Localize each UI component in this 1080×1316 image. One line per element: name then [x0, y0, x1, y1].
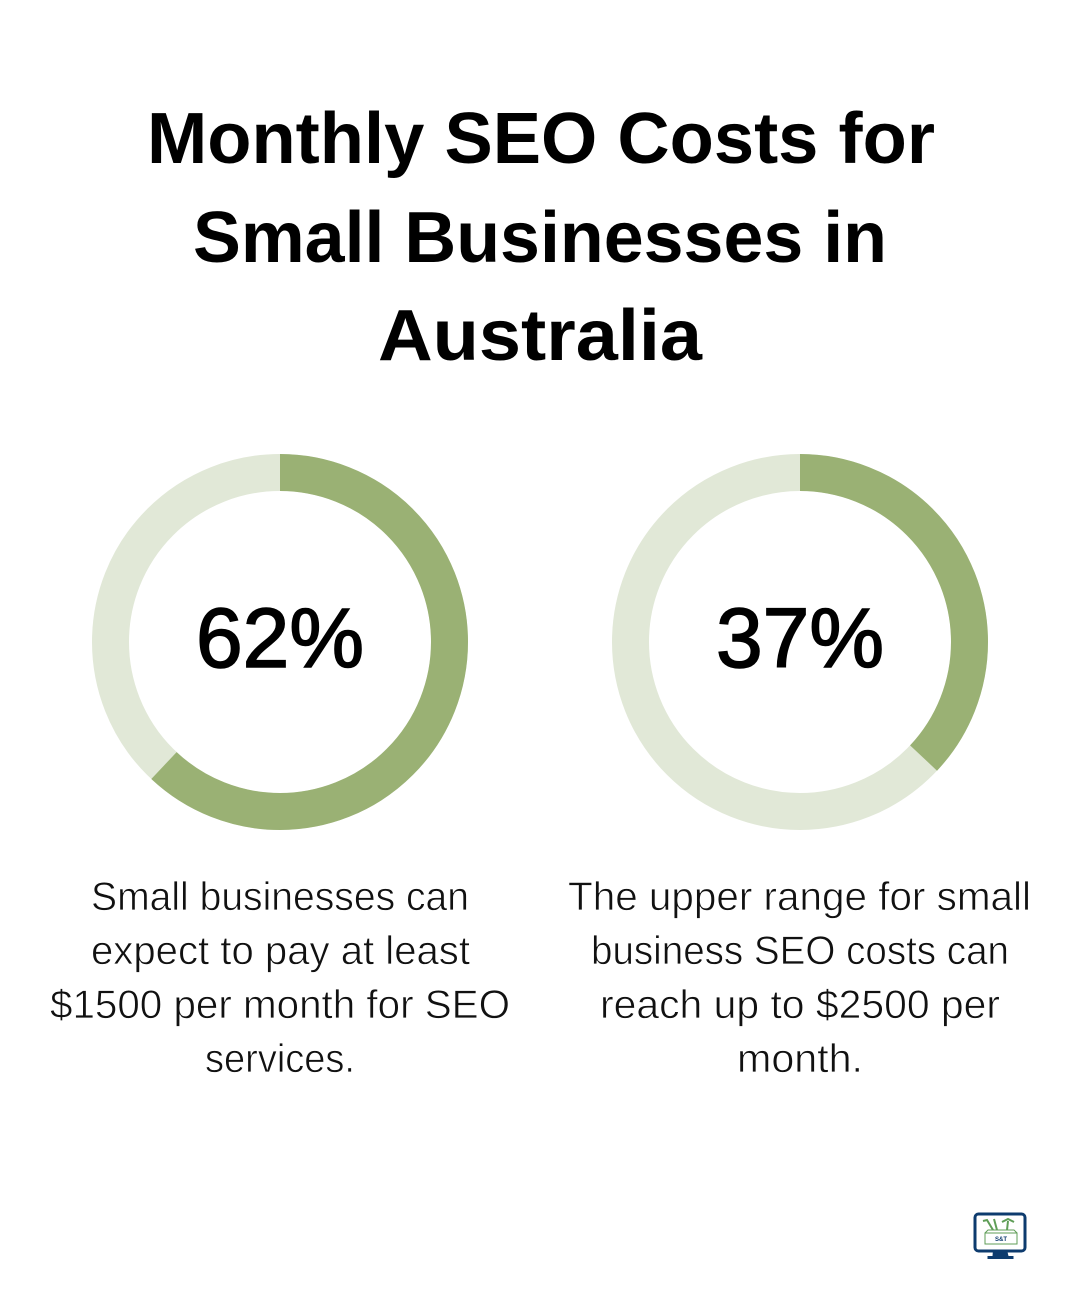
- panel: 62% statistic: [50, 472, 510, 1081]
- title: Monthly SEO Costs for: [147, 99, 935, 179]
- panel: 37% statistic: [568, 472, 1031, 1081]
- description: 37%: reach up to $2500 per: [600, 983, 1000, 1027]
- title: [147, 99, 935, 376]
- value: 62%: 62%: [196, 591, 364, 685]
- description: 62%: Small businesses can: [91, 875, 469, 919]
- icon: monitor with toolbox logo: S&T: [995, 1237, 1007, 1243]
- description: 62%: services.: [205, 1037, 355, 1081]
- donut chart: 37%: [630, 472, 970, 812]
- description: 37%: [568, 875, 1031, 1081]
- description: 37%: month.: [737, 1037, 863, 1081]
- title: Australia: [378, 296, 703, 376]
- description: 37%: business SEO costs can: [591, 929, 1009, 973]
- description: 37%: The upper range for small: [568, 875, 1031, 919]
- title: Small Businesses in: [193, 198, 887, 278]
- description: 62%: $1500 per month for SEO: [50, 983, 510, 1027]
- icon: monitor with toolbox logo: [975, 1214, 1025, 1259]
- description: 62%: expect to pay at least: [91, 929, 470, 973]
- value: 37%: 37%: [716, 591, 884, 685]
- donut chart: 62%: [110, 472, 450, 812]
- description: 62%: [50, 875, 510, 1081]
